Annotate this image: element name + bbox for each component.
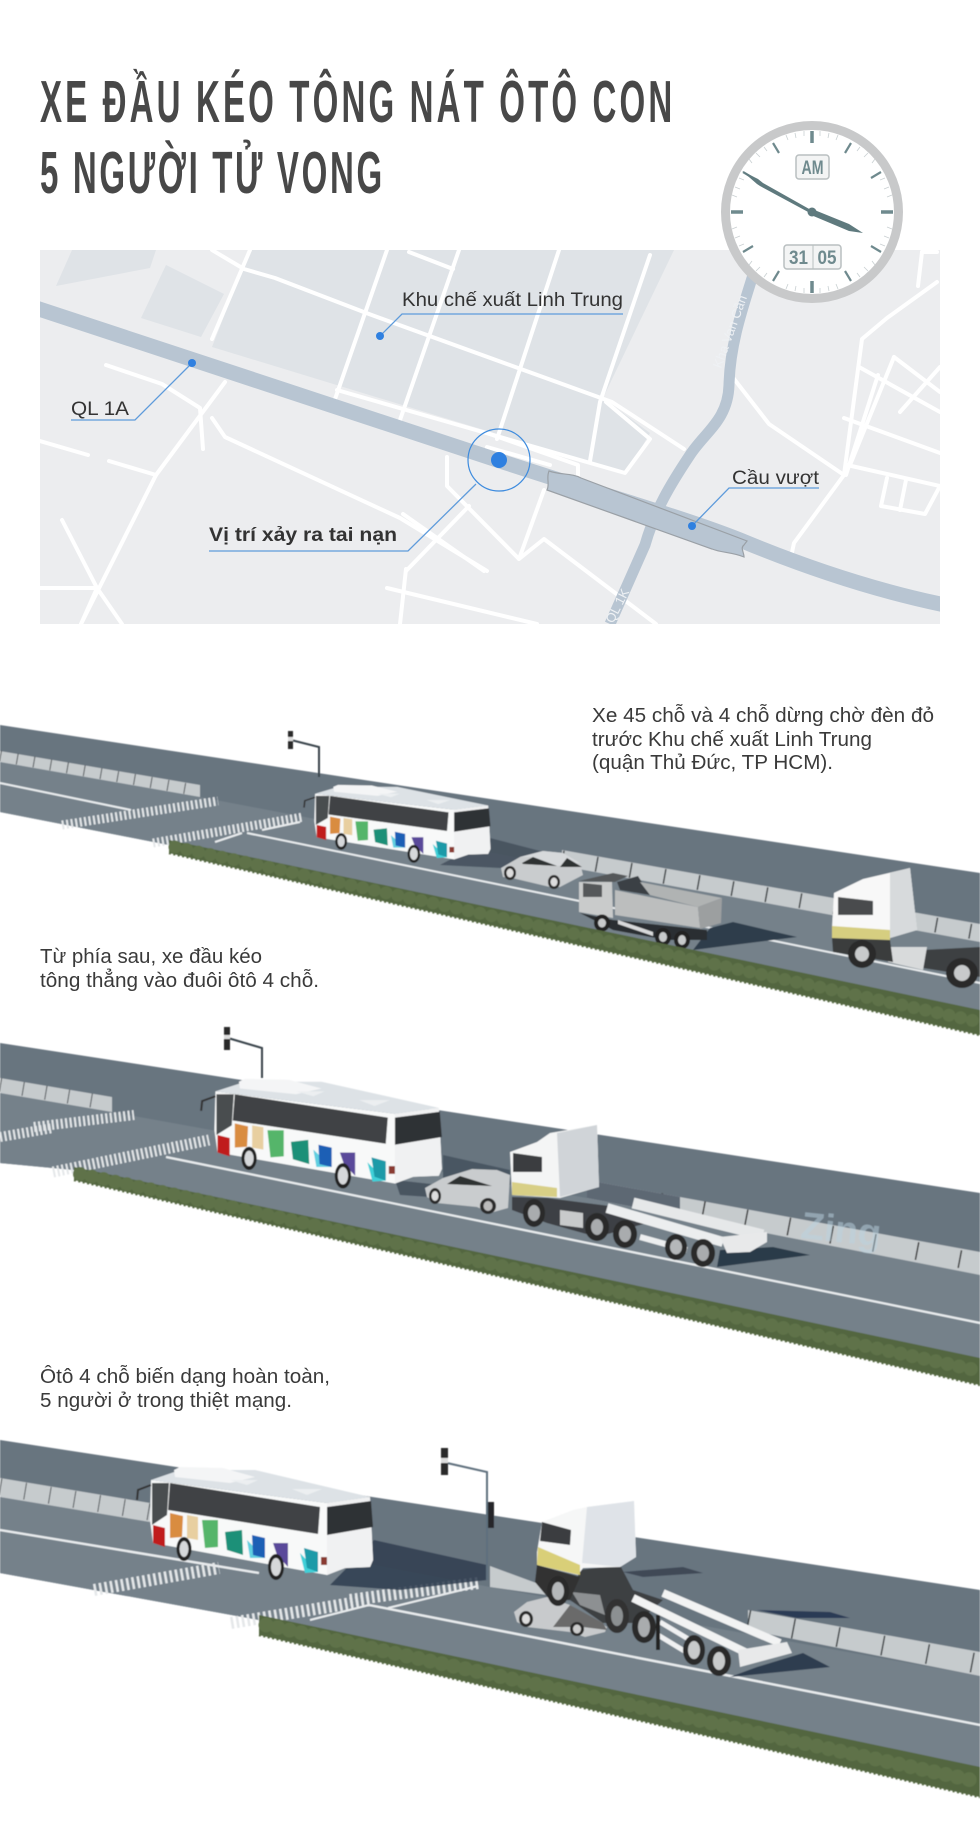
title	[40, 68, 672, 207]
tractor with trailer	[510, 1125, 767, 1267]
panel: location map	[30, 250, 950, 625]
car	[425, 1169, 510, 1214]
lane markings and crosswalks	[166, 1157, 980, 1323]
white street network	[40, 250, 940, 624]
hedge	[74, 1167, 980, 1385]
date and AM boxes	[796, 155, 829, 179]
text block: step 2: tông thẳng vào đuôi ôtô 4 chỗ.	[40, 968, 319, 992]
panel: location map: QL 1K	[602, 586, 632, 625]
road names: Kha Van Cần	[710, 293, 750, 370]
icon: clock: 31	[789, 248, 808, 269]
road: QL 1A highway	[30, 306, 950, 606]
shadows	[330, 1540, 487, 1590]
bus	[201, 1079, 442, 1188]
label: QL 1A	[71, 359, 196, 420]
clock hands	[742, 171, 811, 213]
bus	[304, 785, 490, 863]
panel: scene 3 car crushed under tractor	[0, 1440, 980, 1797]
flyover	[547, 471, 747, 557]
car	[501, 851, 583, 889]
lane markings and crosswalks	[0, 1530, 980, 1725]
icon: clock: AM	[802, 158, 824, 179]
text block: step 3: 5 người ở trong thiệt mạng.	[40, 1390, 292, 1412]
industrial zone block	[212, 250, 674, 475]
road	[0, 1440, 980, 1770]
traffic light	[224, 1027, 262, 1078]
label: accident location	[209, 429, 530, 551]
bus	[137, 1467, 373, 1580]
tractor with trailer on top of car	[535, 1501, 792, 1676]
text block: step 1: (quận Thủ Đức, TP HCM).	[592, 752, 833, 774]
label: accident location: Vị trí xảy ra tai nạn	[209, 525, 397, 546]
text block: step 2: Từ phía sau, xe đầu kéo	[40, 946, 262, 968]
tractor truck	[832, 868, 980, 988]
label: Khu che xuat Linh Trung	[376, 290, 623, 340]
road	[0, 1043, 980, 1360]
dump truck	[579, 873, 722, 949]
hedge	[259, 1615, 980, 1797]
label: Cau vuot	[688, 468, 820, 530]
traffic light	[441, 1448, 494, 1580]
crushed car	[514, 1597, 607, 1637]
label: Khu che xuat Linh Trung: Khu chế xuất Linh Trung	[402, 290, 623, 311]
text block: step 2	[40, 946, 319, 992]
icon: clock	[726, 126, 898, 298]
panel: scene 2 tractor hits car	[0, 1027, 980, 1385]
label: Cau vuot: Cầu vượt	[732, 468, 820, 489]
text block: step 3: Ôtô 4 chỗ biến dạng hoàn toàn,	[40, 1365, 330, 1388]
panel: scene 1 vehicles stopped at red light	[0, 725, 980, 1035]
text block: step 1: trước Khu chế xuất Linh Trung	[592, 729, 872, 751]
text block: step 1	[592, 704, 934, 774]
text block: step 3	[40, 1365, 330, 1412]
median barrier	[0, 1078, 112, 1112]
icon: clock: 05	[818, 248, 837, 269]
text block: step 1: Xe 45 chỗ và 4 chỗ dừng chờ đèn đỏ	[592, 704, 934, 727]
median barrier	[0, 1478, 150, 1522]
lane markings and crosswalks	[0, 783, 980, 983]
title: XE ĐẦU KÉO TÔNG NÁT ÔTÔ CON	[40, 68, 672, 136]
median barrier	[0, 751, 200, 797]
label: QL 1A: QL 1A	[71, 399, 129, 420]
shadows	[440, 838, 575, 880]
title: 5 NGƯỜI TỬ VONG	[40, 139, 382, 207]
watermark: Zing	[799, 1205, 883, 1255]
hedge	[169, 840, 980, 1035]
road: Kha Van Can and QL 1K	[610, 275, 753, 624]
shadows	[443, 1155, 510, 1185]
traffic light	[288, 731, 319, 777]
road	[0, 725, 980, 1015]
